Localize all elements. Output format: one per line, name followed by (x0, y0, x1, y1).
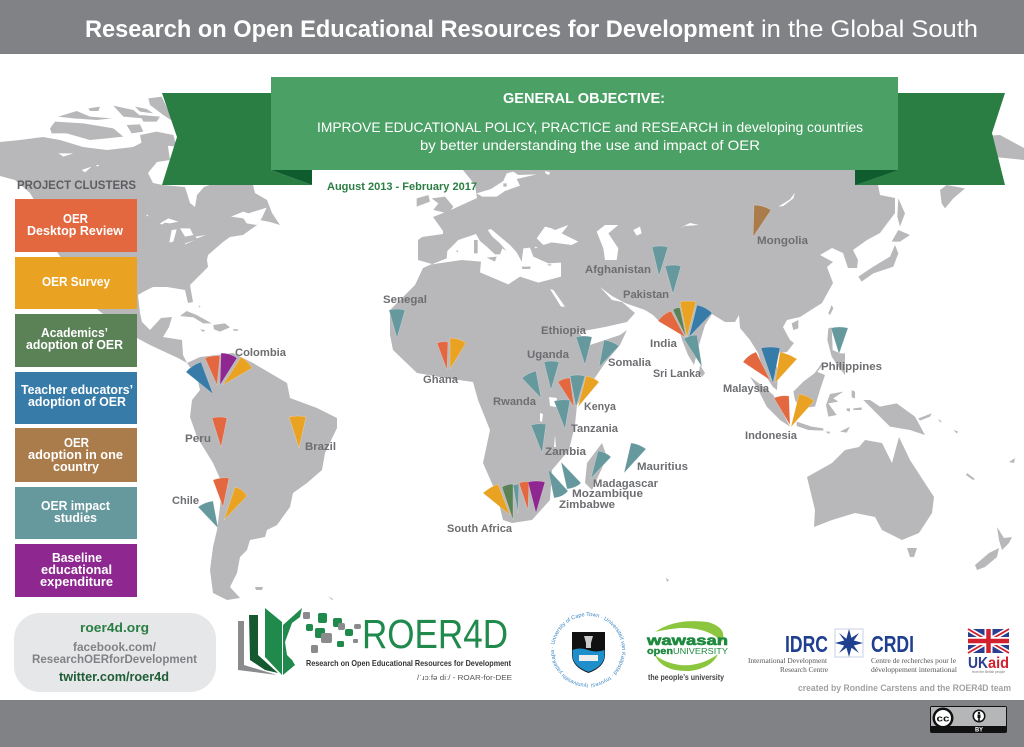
contact links panel: ResearchOERforDevelopment (32, 654, 197, 666)
world map (0, 97, 1024, 600)
Wawasan Open University logo: the people’s university (648, 673, 724, 682)
country labels: Mauritius (637, 461, 688, 473)
country labels: Kenya (584, 401, 617, 413)
title: in the Global South (761, 16, 978, 43)
UK aid logo: aid (988, 655, 1009, 672)
country labels: South Africa (447, 523, 513, 535)
Sri Lanka (699, 365, 705, 377)
country labels: Ghana (423, 374, 459, 386)
objective text: IMPROVE EDUCATIONAL POLICY, PRACTICE and RESEARCH in developing countries (317, 119, 863, 135)
IDRC CRDI logo: Research Centre (780, 665, 829, 674)
cluster: impact studies: OER impact (41, 499, 111, 513)
pin: Mozambique (561, 462, 581, 489)
project clusters legend (15, 178, 137, 597)
country labels: Malaysia (723, 383, 770, 395)
cluster: survey: OER Survey (42, 275, 110, 289)
cluster: impact studies (15, 487, 137, 539)
country labels: Senegal (383, 294, 427, 306)
ROER4D logo (238, 608, 512, 682)
pins: India (658, 301, 712, 337)
cluster: one country: OER (64, 436, 89, 450)
Madagascar (585, 443, 607, 490)
icon: pixel squares (303, 612, 361, 653)
pin: Mauritius (624, 443, 646, 473)
Southeast Asia islands (750, 327, 958, 435)
icon: book (238, 608, 302, 675)
objective text: by better understanding the use and impact of OER (420, 137, 760, 153)
pin: Brazil (289, 416, 306, 448)
objective text (317, 119, 863, 153)
contact links panel: roer4d.org (80, 620, 149, 635)
country labels: Peru (185, 433, 211, 445)
Caribbean (180, 305, 239, 332)
cluster: academics (15, 314, 137, 367)
contact links panel: twitter.com/roer4d (59, 670, 169, 684)
pin: Zimbabwe (548, 469, 568, 498)
logo tagline: Research on Open Educational Resources for Development (306, 658, 511, 668)
Arctic islands (50, 97, 177, 147)
pins: Indonesia (774, 394, 814, 427)
IDRC CRDI logo: Centre de recherches pour le (871, 656, 957, 665)
Eurasia and Africa (390, 135, 1024, 523)
country labels: Chile (172, 495, 199, 507)
country labels: Zimbabwe (559, 499, 615, 511)
Wawasan Open University logo (646, 621, 729, 682)
cluster: baseline expenditure: expenditure (40, 575, 113, 589)
country labels: Zambia (545, 446, 587, 458)
country labels: Uganda (527, 349, 570, 361)
title: Research on Open Educational Resources for Development (85, 16, 754, 43)
legend heading: PROJECT CLUSTERS (17, 178, 136, 192)
pin: Sri Lanka (684, 335, 702, 367)
cluster: baseline expenditure: educational (41, 563, 112, 577)
project dates: August 2013 - February 2017 (327, 181, 477, 193)
footer band (0, 700, 1024, 747)
IDRC CRDI logo (748, 629, 957, 674)
header band (0, 0, 1024, 54)
IDRC CRDI logo: International Development (748, 656, 828, 665)
UK aid logo (968, 629, 1009, 674)
IDRC CRDI logo: CRDI (871, 631, 914, 657)
pins: Malaysia (743, 347, 797, 383)
country labels: Philippines (821, 361, 882, 373)
British Isles and Mediterranean islands (417, 183, 552, 269)
cluster: one country: adoption in one (28, 448, 123, 462)
IDRC CRDI logo: développement international (871, 665, 957, 674)
country labels: Brazil (305, 441, 336, 453)
pin: Peru (212, 417, 227, 447)
Wawasan Open University logo: wawasan (646, 632, 728, 648)
pin: Afghanistan (652, 246, 668, 276)
country labels: Madagascar (593, 478, 659, 490)
pin: Pakistan (665, 265, 681, 294)
contact links panel (14, 613, 216, 692)
country labels: Mozambique (572, 488, 643, 500)
cluster: one country (15, 428, 137, 482)
Creative Commons badge (930, 706, 1007, 734)
country labels: Tanzania (571, 423, 619, 435)
UCT logo: Iyunivesithi yaseKapa · University of Cape Town · Universiteit van Kaapstad · Inyuvesi (550, 612, 626, 688)
icon: IDRC star (835, 629, 863, 657)
country labels: Rwanda (493, 396, 537, 408)
map pins (186, 205, 848, 528)
UK aid logo: from the British people (972, 669, 1006, 674)
East Asia islands (792, 185, 965, 330)
pin: Madagascar (591, 451, 611, 478)
country labels: Afghanistan (585, 264, 651, 276)
cluster: academics: Academics’ (41, 326, 108, 340)
country labels: Mongolia (757, 235, 809, 247)
pin: Ethiopia (576, 336, 592, 365)
country labels: Sri Lanka (653, 368, 702, 380)
icon: Union flag (968, 629, 1009, 653)
pins: South Africa (483, 481, 545, 520)
UK aid logo: UK (968, 655, 988, 672)
cluster: academics: adoption of OER (26, 338, 123, 352)
cluster: teacher educators: adoption of OER (28, 395, 126, 409)
pin: Somalia (599, 340, 619, 367)
cluster: baseline expenditure (15, 544, 137, 597)
Creative Commons badge: BY (975, 728, 983, 734)
country labels: Indonesia (745, 430, 798, 442)
Creative Commons badge: cc (936, 714, 950, 724)
Australia, Tasmania and New Zealand (666, 437, 1015, 582)
South America (187, 353, 337, 600)
cluster: desktop review: OER (63, 212, 88, 226)
objective heading: GENERAL OBJECTIVE: (503, 90, 665, 107)
Wawasan Open University logo: open (647, 646, 673, 657)
pin: Uganda (544, 361, 559, 390)
pin: Mongolia (753, 205, 771, 237)
pronunciation: /ˈɹɔːfə diː/ - ROAR-for-DEE (417, 673, 512, 682)
cluster: desktop review (15, 199, 137, 252)
cluster: desktop review: Desktop Review (27, 224, 123, 238)
cluster: teacher educators (15, 372, 137, 424)
country labels: Colombia (235, 347, 287, 359)
seas and lakes (58, 153, 795, 447)
pin: Senegal (389, 309, 405, 338)
IDRC CRDI logo: IDRC (785, 631, 828, 657)
country labels: Pakistan (623, 289, 669, 301)
objective banner (271, 77, 898, 170)
contact links panel: facebook.com/ (73, 642, 157, 654)
country labels: Ethiopia (541, 325, 587, 337)
pins: Ghana (437, 338, 466, 370)
pins: Chile (198, 478, 247, 528)
right ribbon (855, 93, 1005, 185)
left ribbon (162, 93, 312, 185)
pin: Rwanda (522, 371, 541, 398)
cluster: survey (15, 257, 137, 309)
logo wordmark: ROER4D (362, 611, 508, 657)
islands (417, 183, 1015, 582)
cluster: impact studies: studies (54, 511, 97, 525)
pin: Tanzania (554, 400, 570, 429)
pin: Zambia (531, 424, 546, 453)
country labels (172, 235, 882, 535)
cluster: baseline expenditure: Baseline (52, 551, 102, 565)
pins: Colombia (186, 353, 252, 394)
Wawasan Open University logo: UNIVERSITY (673, 647, 729, 656)
country labels: Somalia (608, 357, 652, 369)
cluster: teacher educators: Teacher educators’ (21, 383, 133, 397)
North America (0, 137, 280, 363)
pin: Philippines (831, 327, 848, 354)
country labels: India (650, 338, 678, 350)
pins: Kenya (558, 375, 599, 407)
cluster: one country: country (53, 460, 99, 474)
